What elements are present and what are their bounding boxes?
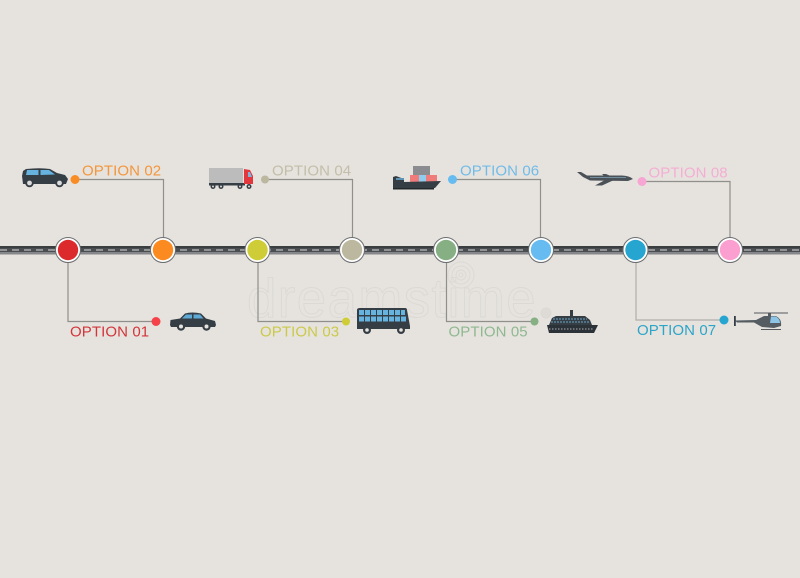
icon: hatchback car — [22, 168, 68, 187]
dot 01 — [152, 317, 160, 326]
label: option 01: OPTION 01 — [70, 324, 149, 340]
icon: cargo ship — [393, 166, 441, 190]
icon: double-decker bus — [357, 308, 410, 334]
label: option 02: OPTION 02 — [82, 162, 161, 180]
road — [0, 246, 800, 254]
dot 05 — [530, 318, 538, 326]
icon: cruise ship — [547, 310, 598, 333]
node 08 — [718, 238, 742, 262]
node 01 — [56, 238, 80, 262]
dot 02 — [70, 175, 80, 184]
dot 08 — [638, 177, 646, 186]
node 05 — [434, 238, 458, 262]
label: option 07: OPTION 07 — [637, 322, 716, 339]
label: option 04: OPTION 04 — [272, 162, 351, 180]
node 04 — [340, 238, 364, 262]
node 03 — [245, 238, 270, 262]
node 02 — [150, 238, 176, 262]
dot 03 — [342, 318, 350, 326]
icon: airplane — [577, 172, 633, 186]
label: option 06: OPTION 06 — [460, 162, 539, 180]
connector lines — [68, 180, 730, 322]
icon: truck — [209, 168, 253, 189]
dot 07 — [720, 316, 728, 324]
node 06 — [528, 238, 554, 262]
label: option 05: OPTION 05 — [448, 324, 528, 340]
node 07 — [623, 238, 648, 262]
dot 06 — [448, 175, 457, 184]
icon: helicopter — [734, 313, 788, 330]
icon: sedan car — [170, 312, 216, 331]
dot 04 — [261, 176, 269, 184]
watermark: dreamstime — [247, 267, 537, 329]
label: option 08: OPTION 08 — [648, 164, 728, 182]
label: option 03: OPTION 03 — [260, 324, 339, 340]
